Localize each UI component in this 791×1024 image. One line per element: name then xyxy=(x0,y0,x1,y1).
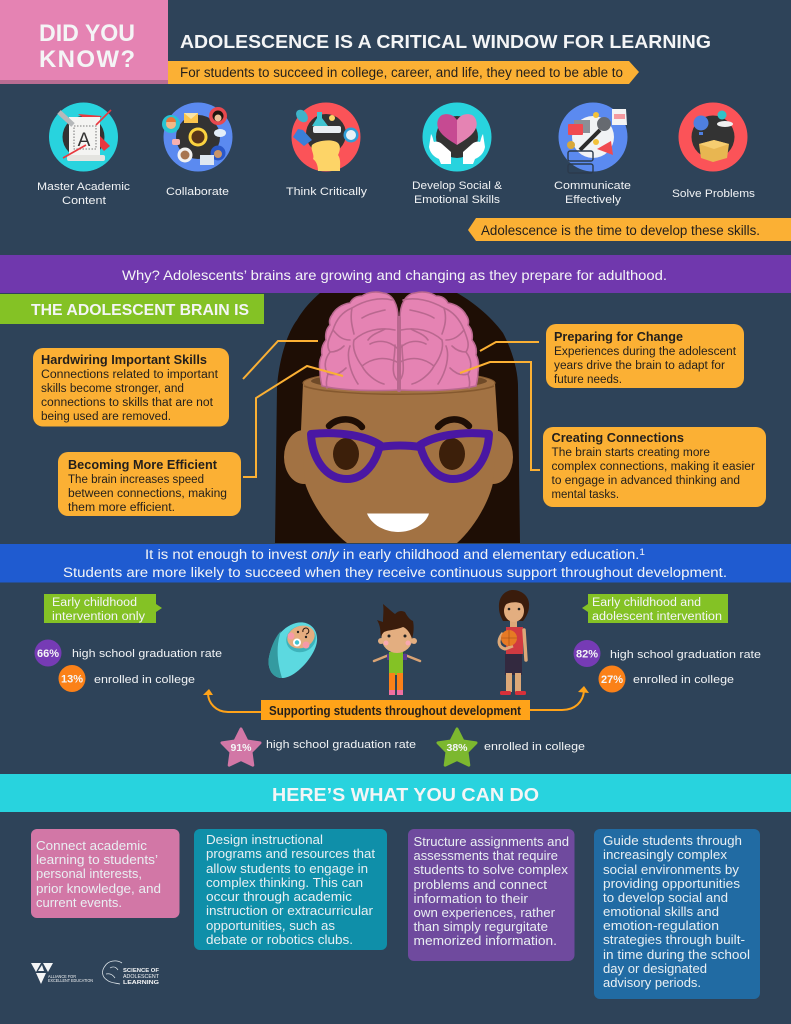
action card: design instructional programs: programs and resources that xyxy=(206,846,375,861)
stat: 82 percent graduation: high school graduation rate xyxy=(610,649,761,661)
callout: creating connections xyxy=(543,427,766,507)
stat: 13 percent college xyxy=(58,665,195,692)
callout: creating connections: Creating Connections xyxy=(552,430,684,445)
stat: 91 percent graduation xyxy=(222,729,416,765)
label: Master Academic xyxy=(37,181,131,193)
skill: communicate effectively xyxy=(554,102,631,206)
stat: 66 percent graduation: high school graduation rate xyxy=(72,648,222,660)
callout: becoming more efficient: Becoming More Efficient xyxy=(68,457,218,472)
action card: guide students: emotion-regulation xyxy=(603,918,719,933)
hair xyxy=(275,293,520,543)
front rim of head xyxy=(303,384,495,400)
banner: for students to succeed: For students to succeed in college, career, and life, they need to be able to xyxy=(180,65,623,80)
banner: supporting students xyxy=(261,700,530,720)
callout: becoming more efficient xyxy=(58,452,241,516)
label xyxy=(37,181,131,207)
label: Solve Problems xyxy=(672,188,756,200)
label xyxy=(412,180,503,206)
head xyxy=(301,383,498,543)
teal band: here's what you can do: HERE’S WHAT YOU CAN DO xyxy=(272,784,539,805)
action card: connect academic learning: personal interests, xyxy=(36,866,142,881)
action card: connect academic learning: current events. xyxy=(36,895,122,910)
tag: early childhood only: intervention only xyxy=(52,611,145,623)
action card: design instructional programs xyxy=(194,829,387,950)
callout: preparing for change: Preparing for Change xyxy=(554,329,683,344)
callout: creating connections: mental tasks. xyxy=(552,489,619,501)
callout: hardwiring important skills: being used are removed. xyxy=(41,411,171,423)
glasses xyxy=(311,433,489,479)
purple band: why: Why? Adolescents’ brains are growing and changing as they prepare for adulthood. xyxy=(122,267,667,283)
callout: creating connections: The brain starts creating more xyxy=(552,447,710,459)
stat: 27 percent college: enrolled in college xyxy=(633,674,734,686)
action card: design instructional programs: opportunities, such as xyxy=(206,918,335,933)
logo: alliance for excellent education xyxy=(31,963,93,984)
label: Think Critically xyxy=(286,186,368,198)
action card: structure assignments: information to their xyxy=(414,891,529,906)
stat: 91 percent graduation: high school graduation rate xyxy=(266,739,416,751)
action card: guide students xyxy=(594,829,760,999)
action card: structure assignments xyxy=(408,829,574,961)
header badge: did you know: KNOW? xyxy=(39,46,135,73)
label: Content xyxy=(62,195,106,207)
eyebrows xyxy=(329,419,469,427)
logo: science of adolescent learning: SCIENCE OF xyxy=(123,968,160,974)
tag: early childhood and adolescent xyxy=(582,594,728,623)
action card: structure assignments: assessments that require xyxy=(414,848,558,863)
skill: collaborate xyxy=(162,102,232,198)
action card: structure assignments: memorized information. xyxy=(414,933,557,948)
action card: design instructional programs: complex thinking. This can xyxy=(206,875,363,890)
purple band: why xyxy=(0,255,791,293)
action card: guide students: in time during the school xyxy=(603,947,750,962)
logo: alliance for excellent education: ALLIANCE FOR xyxy=(48,974,76,979)
title: ADOLESCENCE IS A CRITICAL WINDOW FOR LEARNING xyxy=(180,31,711,52)
stat: 82 percent graduation: 82% xyxy=(576,648,598,660)
stat: 27 percent college: 27% xyxy=(601,674,623,686)
tag: early childhood and adolescent: adolescent intervention xyxy=(592,611,722,623)
action card: structure assignments: students to solve complex xyxy=(414,862,569,877)
brain xyxy=(319,292,479,391)
header badge: did you know: DID YOU xyxy=(39,20,135,47)
skill: master academic content xyxy=(37,102,131,207)
action card: design instructional programs: debate or robotics clubs. xyxy=(206,932,353,947)
blue band: continuous support: Students are more likely to succeed when they receive continuous support throughout development. xyxy=(63,565,727,580)
arrow: right xyxy=(530,686,589,710)
action card: connect academic learning: prior knowledge, and xyxy=(36,881,161,896)
green heading: the adolescent brain is xyxy=(0,294,264,324)
smile xyxy=(367,514,429,532)
callout: hardwiring important skills: skills become stronger, and xyxy=(41,383,184,395)
action card: design instructional programs: allow students to engage in xyxy=(206,861,368,876)
action card: connect academic learning: learning to students’ xyxy=(36,852,158,867)
callout: becoming more efficient: them more efficient. xyxy=(68,502,175,514)
skill: solve problems xyxy=(672,102,756,200)
stat: 38 percent college xyxy=(438,729,585,765)
callout: becoming more efficient: between connections, making xyxy=(68,488,227,500)
action card: guide students: increasingly complex xyxy=(603,847,728,862)
skill: think critically xyxy=(286,102,368,198)
banner: supporting students: Supporting students throughout development xyxy=(269,703,522,718)
logo: science of adolescent learning: LEARNING xyxy=(123,980,159,986)
stat: 66 percent graduation: 66% xyxy=(37,648,59,660)
action card: structure assignments: than simply regurgitate xyxy=(414,919,548,934)
logo: science of adolescent learning: ADOLESCENT xyxy=(123,974,160,980)
label: Emotional Skills xyxy=(414,194,501,206)
action card: guide students: providing opportunities xyxy=(603,876,740,891)
action card: connect academic learning: Connect academic xyxy=(36,838,148,853)
action card: design instructional programs: Design instructional xyxy=(206,832,323,847)
action card: guide students: strategies through built- xyxy=(603,932,745,947)
green heading: the adolescent brain is: THE ADOLESCENT BRAIN IS xyxy=(31,302,249,319)
banner: for students to succeed xyxy=(168,61,639,84)
stat: 27 percent college xyxy=(598,666,734,692)
illustration: girl with open head and brain xyxy=(275,292,520,543)
blue band: continuous support: 1 xyxy=(639,547,645,557)
action card: connect academic learning xyxy=(31,829,180,918)
header badge: did you know xyxy=(0,0,168,84)
callout: preparing for change: Experiences during the adolescent xyxy=(554,346,737,358)
callout: hardwiring important skills: Connections related to important xyxy=(41,369,219,381)
illustration: boy xyxy=(374,604,420,695)
action card: structure assignments: own experiences, rather xyxy=(414,905,556,920)
blue band: continuous support: It is not enough to invest only in early childhood and elementary education. xyxy=(145,547,610,562)
logo: science of adolescent learning xyxy=(103,961,160,986)
tag: early childhood only xyxy=(44,594,162,623)
callout: preparing for change: years drive the brain to adapt for xyxy=(554,360,725,372)
action card: guide students: emotional skills and xyxy=(603,904,719,919)
label: Collaborate xyxy=(166,186,229,198)
connector lines xyxy=(243,341,540,477)
callout: preparing for change: future needs. xyxy=(554,374,622,386)
callout: hardwiring important skills: connections to skills that are not xyxy=(41,397,214,409)
action card: structure assignments: Structure assignments and xyxy=(414,834,569,849)
banner: adolescence is the time: Adolescence is the time to develop these skills. xyxy=(481,223,760,238)
action card: design instructional programs: occur through academic xyxy=(206,889,353,904)
action card: guide students: advisory periods. xyxy=(603,975,701,990)
skill: master academic content: A xyxy=(78,130,91,151)
teal band: here's what you can do xyxy=(0,774,791,812)
ears xyxy=(284,430,513,484)
stat: 13 percent college: enrolled in college xyxy=(94,674,195,686)
illustration: girl with basketball xyxy=(499,590,529,695)
skill: develop social and emotional skills xyxy=(412,102,503,206)
arrow: left xyxy=(203,689,261,712)
tag: early childhood only: Early childhood xyxy=(52,597,137,609)
callout: hardwiring important skills: Hardwiring Important Skills xyxy=(41,352,207,367)
label: Develop Social & xyxy=(412,180,503,192)
action card: structure assignments: problems and connect xyxy=(414,877,547,892)
callout: creating connections: to engage in advanced thinking and xyxy=(552,475,740,487)
label: Effectively xyxy=(565,194,622,206)
logo: alliance for excellent education: EXCELLENT EDUCATION xyxy=(48,978,93,983)
callout: becoming more efficient: The brain increases speed xyxy=(68,474,204,486)
banner: adolescence is the time xyxy=(468,218,791,241)
stat: 82 percent graduation xyxy=(574,640,761,667)
action card: guide students: Guide students through xyxy=(603,833,742,848)
callout: hardwiring important skills xyxy=(33,348,229,426)
stat: 91 percent graduation: 91% xyxy=(230,742,252,754)
illustration: baby xyxy=(269,622,320,678)
blue band: continuous support xyxy=(0,544,791,582)
action card: design instructional programs: instruction or extracurricular xyxy=(206,903,374,918)
stat: 38 percent college: 38% xyxy=(446,742,468,754)
stat: 66 percent graduation xyxy=(34,640,222,666)
tag: early childhood and adolescent: Early childhood and xyxy=(592,597,701,609)
skills row xyxy=(37,102,756,207)
callout: creating connections: complex connections, making it easier xyxy=(552,461,755,473)
action card: guide students: day or designated xyxy=(603,961,707,976)
label: Communicate xyxy=(554,180,631,192)
action card: guide students: social environments by xyxy=(603,862,740,877)
stat: 13 percent college: 13% xyxy=(61,674,83,686)
callout: preparing for change xyxy=(546,324,744,388)
action card: guide students: to develop social and xyxy=(603,890,728,905)
stat: 38 percent college: enrolled in college xyxy=(484,741,585,753)
eyes xyxy=(333,438,465,470)
label xyxy=(554,180,631,206)
